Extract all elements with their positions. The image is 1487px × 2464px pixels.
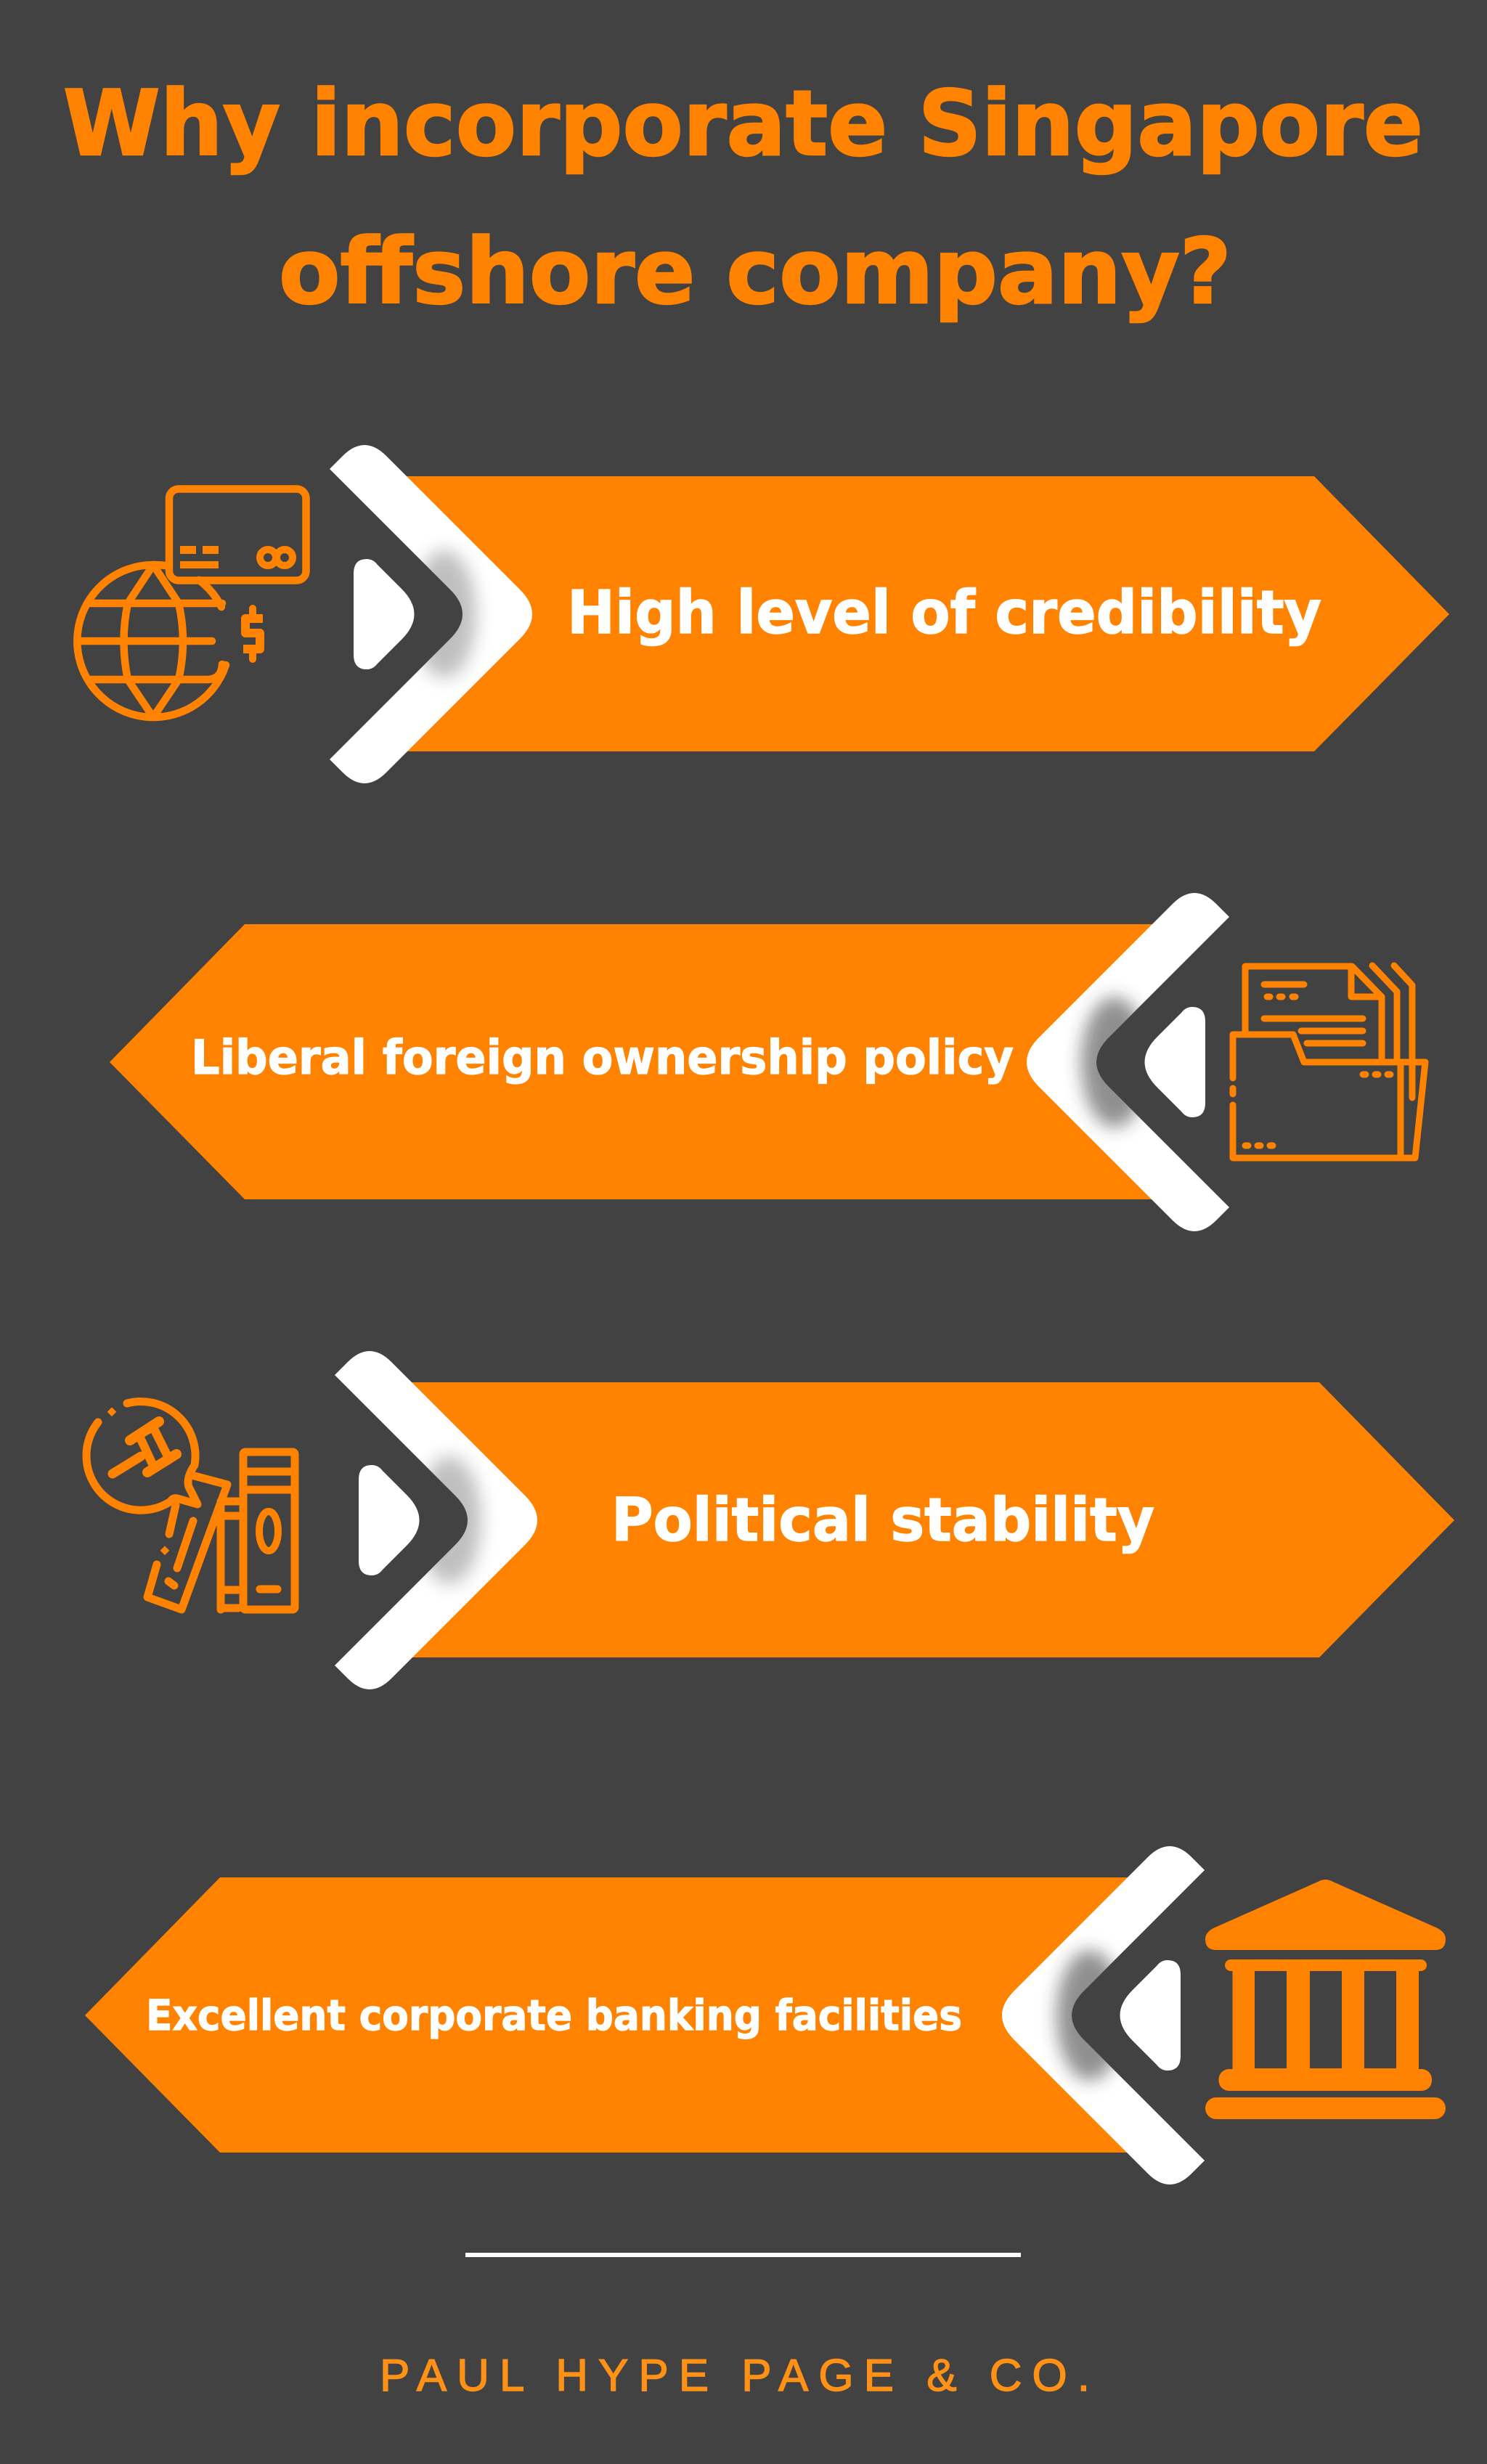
title <box>63 72 1423 325</box>
panel: political stability <box>86 1351 1454 1689</box>
footer brand name: PAUL HYPE PAGE & CO. <box>380 2351 1090 2401</box>
label: high level of credibility: High level of credibility <box>567 579 1321 648</box>
panel: high level of credibility <box>77 445 1449 783</box>
arrow banner 2 <box>110 893 1229 1231</box>
icon: folder with documents <box>1233 966 1425 1158</box>
label: political stability: Political stability <box>611 1486 1154 1555</box>
panel: excellent corporate banking facilities <box>85 1846 1446 2184</box>
title: offshore company? <box>279 220 1231 325</box>
title: Why incorporate Singapore <box>63 72 1423 176</box>
arrow banner 1 <box>330 445 1449 783</box>
icon: gavel speech bubble and law books <box>86 1402 295 1610</box>
arrow banner 3 <box>335 1351 1454 1689</box>
divider line <box>465 2253 1021 2257</box>
arrow banner 4 <box>85 1846 1205 2184</box>
icon: bank building <box>1205 1880 1446 2119</box>
label: liberal foreign ownership policy: Liberal foreign ownership policy <box>191 1031 1014 1085</box>
icon: globe with credit card and dollar <box>77 489 306 717</box>
label: excellent corporate banking facilities: Excellent corporate banking facilities <box>146 1991 962 2040</box>
panel: liberal foreign ownership policy <box>110 893 1425 1231</box>
